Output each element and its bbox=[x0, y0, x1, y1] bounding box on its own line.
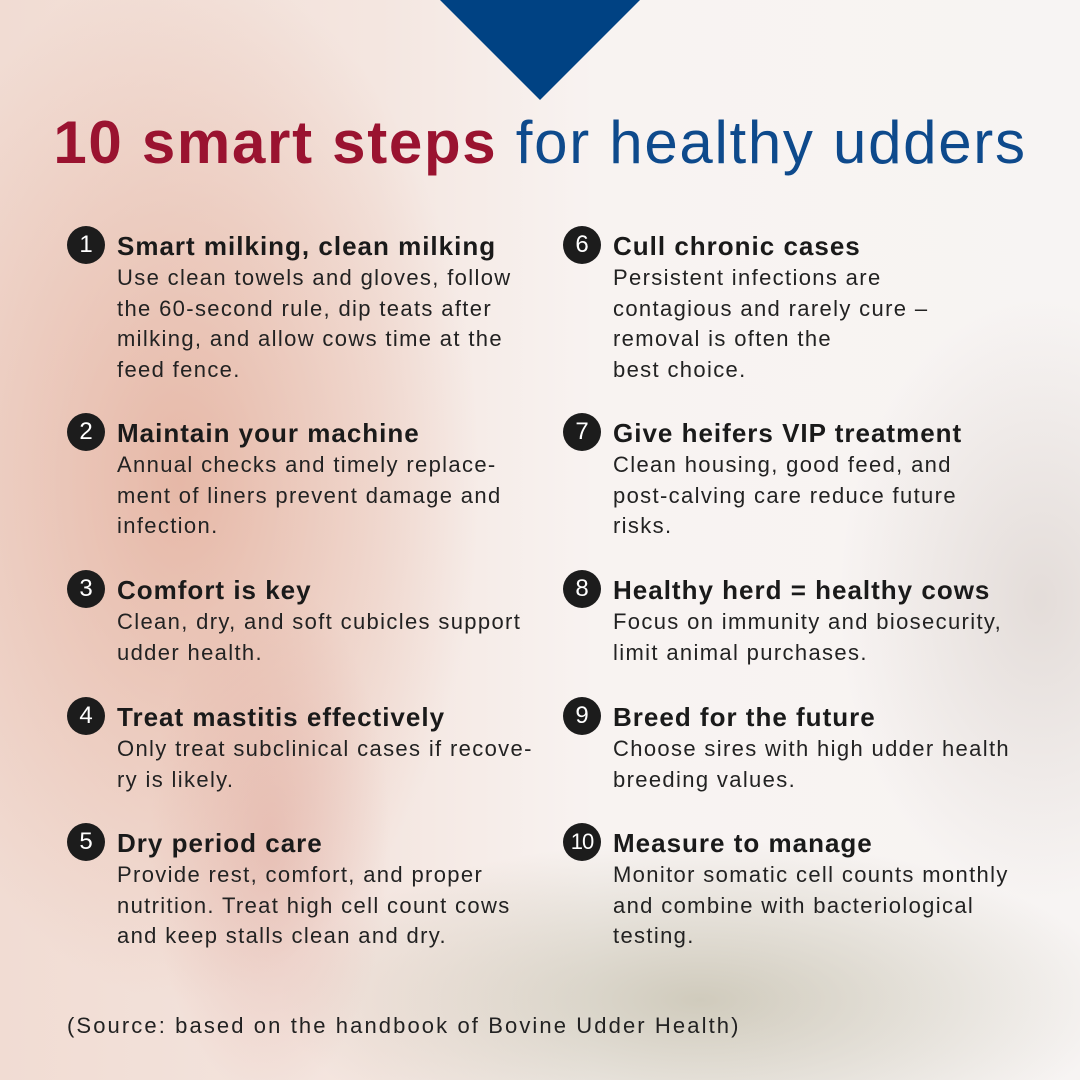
step 2: Annual checks and timely replace- bbox=[117, 452, 497, 477]
text: 3 bbox=[79, 575, 93, 602]
text: 1 bbox=[79, 231, 93, 258]
step 3: Comfort is key bbox=[117, 575, 312, 605]
step 1: the 60-second rule, dip teats after bbox=[117, 296, 492, 320]
step 3: Clean, dry, and soft cubicles support bbox=[117, 609, 521, 634]
step 6: removal is often the bbox=[613, 326, 832, 351]
step 2: infection. bbox=[117, 513, 219, 538]
text: 10 bbox=[571, 829, 593, 854]
step 5 bbox=[67, 823, 511, 948]
text: 4 bbox=[79, 702, 93, 729]
step 5: nutrition. Treat high cell count cows bbox=[117, 892, 511, 918]
step 1: Use clean towels and gloves, follow bbox=[117, 265, 512, 290]
step 9 bbox=[563, 697, 1010, 792]
step 8: limit animal purchases. bbox=[613, 640, 868, 664]
step 4: Treat mastitis effectively bbox=[117, 702, 445, 732]
step 1: milking, and allow cows time at the bbox=[117, 326, 503, 351]
step 6: Persistent infections are bbox=[613, 265, 882, 290]
step 7: Clean housing, good feed, and bbox=[613, 452, 952, 477]
step 7: post-calving care reduce future bbox=[613, 482, 957, 508]
step 7 bbox=[563, 413, 962, 538]
step 8: Healthy herd = healthy cows bbox=[613, 575, 990, 605]
text: 2 bbox=[79, 418, 93, 445]
step 9: Breed for the future bbox=[613, 702, 876, 732]
title: 10 smart steps for healthy udders bbox=[53, 109, 1027, 176]
step 7: Give heifers VIP treatment bbox=[613, 418, 962, 448]
step 10: and combine with bacteriological bbox=[613, 892, 974, 918]
step 6: best choice. bbox=[613, 356, 747, 382]
text: 8 bbox=[575, 575, 589, 602]
step 10: testing. bbox=[613, 923, 695, 948]
step 6: contagious and rarely cure – bbox=[613, 296, 928, 320]
step 7: risks. bbox=[613, 513, 672, 538]
step 4: Only treat subclinical cases if recove- bbox=[117, 736, 533, 761]
step 10: Monitor somatic cell counts monthly bbox=[613, 862, 1009, 887]
icon: top triangle bbox=[440, 0, 640, 100]
step 4 bbox=[67, 697, 533, 792]
step 10 bbox=[563, 823, 1009, 948]
text: 5 bbox=[79, 828, 93, 855]
step 4: ry is likely. bbox=[117, 766, 234, 792]
step 10: Measure to manage bbox=[613, 828, 873, 858]
step 2: ment of liners prevent damage and bbox=[117, 482, 502, 508]
text: 9 bbox=[575, 702, 589, 729]
step 5: Dry period care bbox=[117, 828, 323, 858]
step 2 bbox=[67, 413, 502, 538]
step 9: Choose sires with high udder health bbox=[613, 736, 1010, 761]
step 5: Provide rest, comfort, and proper bbox=[117, 862, 483, 887]
source note: (Source: based on the handbook of Bovine Udder Health) bbox=[67, 1013, 741, 1038]
step 8 bbox=[563, 570, 1002, 664]
step 1 bbox=[67, 226, 512, 382]
step 5: and keep stalls clean and dry. bbox=[117, 923, 447, 948]
step 2: Maintain your machine bbox=[117, 418, 420, 448]
text: 7 bbox=[575, 418, 589, 445]
step 6: Cull chronic cases bbox=[613, 231, 861, 261]
step 1: feed fence. bbox=[117, 356, 241, 382]
step 9: breeding values. bbox=[613, 766, 796, 792]
step 3: udder health. bbox=[117, 640, 263, 664]
step 8: Focus on immunity and biosecurity, bbox=[613, 609, 1002, 634]
step 1: Smart milking, clean milking bbox=[117, 231, 496, 261]
step 6 bbox=[563, 226, 928, 382]
step 3 bbox=[67, 570, 521, 664]
text: 6 bbox=[575, 231, 589, 258]
